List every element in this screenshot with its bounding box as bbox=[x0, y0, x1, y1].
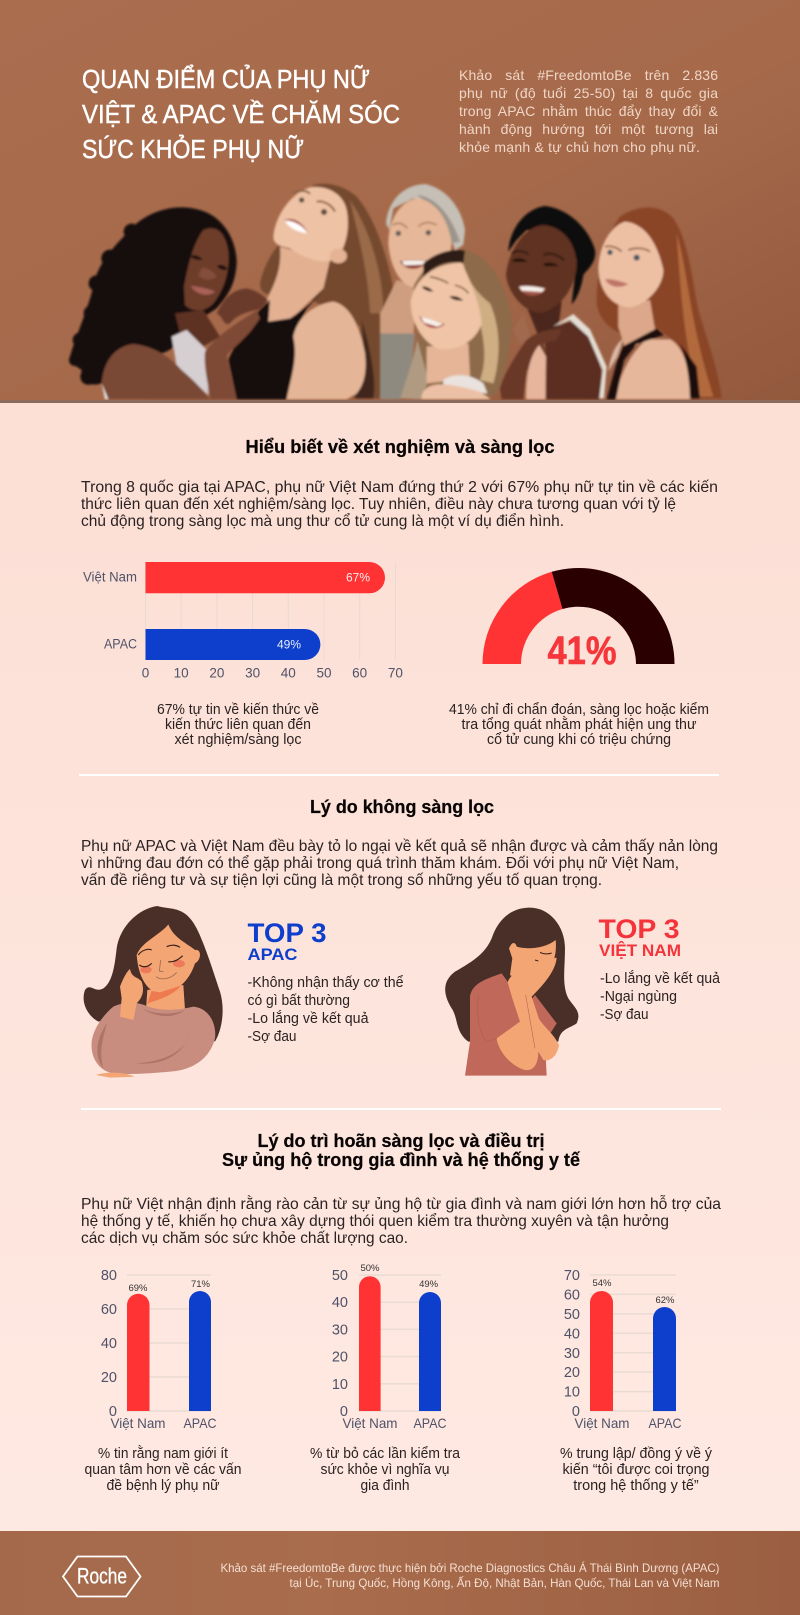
Roche logo: Roche bbox=[77, 1564, 127, 1588]
bar: Việt Nam 69% bbox=[127, 1294, 150, 1411]
horizontal bar chart: Việt Nam bbox=[83, 570, 137, 584]
bar: Việt Nam 67% bbox=[146, 562, 385, 593]
title: QUAN ĐIỂM CỦA PHỤ NỮ bbox=[82, 63, 370, 94]
column chart 1: 69% bbox=[128, 1283, 148, 1294]
survey description: trong APAC nhằm thúc đẩy thay đổi & bbox=[459, 103, 719, 119]
chart 3 caption: % trung lập/ đồng ý về ý bbox=[560, 1446, 713, 1462]
woman C hair bbox=[386, 184, 465, 250]
label: top 3 Việt Nam bbox=[598, 914, 681, 960]
horizontal bar chart: 49% bbox=[277, 638, 301, 652]
horizontal bar chart: 50 bbox=[316, 666, 332, 680]
woman A neck bbox=[175, 310, 220, 347]
heading: Lý do trì hoãn sàng lọc và điều trị bbox=[258, 1130, 544, 1151]
intro text: các dịch vụ chăm sóc sức khỏe chất lượng cao. bbox=[81, 1230, 408, 1247]
column chart 3: 40 bbox=[564, 1326, 580, 1342]
bar: APAC 71% bbox=[189, 1291, 211, 1411]
horizontal bar chart: 67% bbox=[346, 570, 370, 584]
woman B top bbox=[228, 288, 325, 399]
column chart 2: 50 bbox=[332, 1268, 348, 1284]
column chart 3: 62% bbox=[655, 1295, 675, 1306]
list: top 3 APAC reasons: -Lo lắng về kết quả bbox=[248, 1010, 369, 1027]
header bottom band bbox=[0, 400, 800, 403]
list: top 3 Việt Nam reasons bbox=[600, 970, 720, 1023]
Roche logo bbox=[63, 1556, 140, 1596]
chart 3 caption bbox=[560, 1446, 713, 1494]
column chart 1: Việt Nam bbox=[110, 1415, 166, 1431]
intro text bbox=[81, 479, 718, 530]
woman F neck bbox=[618, 300, 655, 353]
woman C neck and shirt bbox=[380, 280, 417, 337]
column chart 3: 30 bbox=[564, 1346, 580, 1362]
woman A face bbox=[184, 228, 229, 310]
survey description: khỏe mạnh & tự chủ hơn cho phụ nữ. bbox=[459, 139, 700, 155]
column chart 2: 10 bbox=[332, 1377, 348, 1393]
horizontal bar chart: 70 bbox=[388, 666, 403, 680]
intro text bbox=[81, 838, 718, 889]
woman E white strap bbox=[553, 314, 607, 398]
list: top 3 Việt Nam reasons: -Lo lắng về kết quả bbox=[600, 970, 720, 987]
panel: reasons for not screening bbox=[81, 796, 720, 1078]
illustration: woman covering her face bbox=[445, 908, 578, 1076]
column chart 1: 71% bbox=[191, 1279, 211, 1290]
horizontal bar chart: 0 bbox=[142, 666, 149, 680]
list: top 3 APAC reasons: -Không nhận thấy cơ thể bbox=[248, 975, 404, 991]
survey source note: tại Úc, Trung Quốc, Hồng Kông, Ấn Độ, Nhật Bản, Hàn Quốc, Thái Lan và Việt Nam bbox=[290, 1575, 720, 1590]
intro text bbox=[81, 1194, 721, 1247]
gauge caption: tra tổng quát nhằm phát hiện ung thư bbox=[462, 716, 697, 733]
column chart 3: 60 bbox=[564, 1288, 580, 1304]
label: top 3 Việt Nam: TOP 3 bbox=[598, 914, 680, 944]
panel: header bbox=[0, 0, 800, 400]
heading bbox=[222, 1130, 581, 1170]
page background bbox=[0, 400, 800, 1531]
horizontal bar chart: 30 bbox=[245, 666, 260, 680]
chart 1 caption bbox=[84, 1445, 242, 1494]
column chart 2: Việt Nam bbox=[342, 1415, 398, 1431]
woman C face bbox=[388, 198, 452, 287]
heading: Sự ủng hộ trong gia đình và hệ thống y tế bbox=[222, 1149, 581, 1170]
column chart 2: 0 bbox=[340, 1404, 348, 1420]
chart 2 caption: gia đình bbox=[360, 1478, 410, 1494]
intro text: Trong 8 quốc gia tại APAC, phụ nữ Việt Nam đứng thứ 2 với 67% phụ nữ tự tin về các kiến bbox=[81, 479, 718, 496]
woman A upper hand bbox=[217, 288, 268, 324]
woman A white top bbox=[172, 330, 208, 395]
list: top 3 Việt Nam reasons: -Sợ đau bbox=[600, 1007, 648, 1023]
column chart 3: 10 bbox=[564, 1384, 580, 1400]
woman E hair bbox=[508, 206, 595, 304]
column chart 2: APAC bbox=[414, 1415, 446, 1431]
label: top 3 APAC bbox=[248, 918, 326, 964]
woman A shoulder bbox=[102, 344, 210, 399]
survey source note: Khảo sát #FreedomtoBe được thực hiện bởi Roche Diagnostics Châu Á Thái Bình Dương (APAC) bbox=[220, 1560, 720, 1575]
intro text: Phụ nữ Việt nhận định rằng rào cản từ sự ủng hộ từ gia đình và nam giới lớn hơn hỗ trợ của bbox=[81, 1194, 721, 1213]
column chart 3: 0 bbox=[572, 1404, 580, 1420]
column chart 1: APAC bbox=[184, 1415, 216, 1431]
column chart 3: 54% bbox=[592, 1278, 612, 1289]
survey description: hành động hướng tới một tương lai bbox=[459, 121, 718, 137]
woman F body bbox=[616, 339, 690, 399]
bar chart caption: xét nghiệm/sàng lọc bbox=[174, 732, 302, 748]
chart 2 caption bbox=[310, 1446, 460, 1494]
panel: knowledge of testing and screening bbox=[81, 436, 718, 748]
horizontal bar chart bbox=[83, 562, 403, 680]
survey description bbox=[459, 67, 719, 155]
woman D hair bbox=[400, 249, 512, 399]
bar: Việt Nam 54% bbox=[590, 1291, 613, 1411]
list: top 3 APAC reasons: -Sợ đau bbox=[248, 1029, 296, 1045]
woman E face bbox=[506, 225, 577, 313]
bar chart caption: kiến thức liên quan đến bbox=[165, 717, 311, 733]
column chart 3: 20 bbox=[564, 1365, 580, 1381]
chart 2 caption: % từ bỏ các lần kiểm tra bbox=[310, 1446, 460, 1462]
label: top 3 Việt Nam: VIỆT NAM bbox=[599, 941, 681, 960]
bar: APAC 49% bbox=[146, 629, 320, 660]
intro text: vì những đau đớn có thể gặp phải trong quá trình thăm khám. Đối với phụ nữ Việt Nam, bbox=[81, 854, 679, 872]
gauge chart 41%: 41% bbox=[548, 629, 616, 673]
title bbox=[82, 63, 400, 164]
column chart 3: 70 bbox=[564, 1268, 580, 1284]
woman D neck and top bbox=[427, 343, 470, 383]
column chart 1: 80 bbox=[101, 1268, 117, 1284]
woman B face bbox=[273, 187, 348, 261]
label: top 3 APAC: APAC bbox=[248, 945, 298, 964]
bar chart caption: 67% tự tin về kiến thức về bbox=[157, 702, 319, 718]
horizontal bar chart: 10 bbox=[174, 666, 189, 680]
column chart 2: 40 bbox=[332, 1295, 348, 1311]
column chart 1 bbox=[101, 1268, 216, 1431]
horizontal bar chart: APAC bbox=[104, 636, 137, 652]
horizontal bar chart: 40 bbox=[281, 666, 296, 680]
column chart 3: APAC bbox=[648, 1415, 682, 1431]
column chart 1: 60 bbox=[101, 1302, 117, 1318]
survey description: Khảo sát #FreedomtoBe trên 2.836 bbox=[459, 67, 718, 83]
illustration: thoughtful woman bbox=[84, 906, 223, 1078]
woman B hair bbox=[260, 184, 395, 398]
column chart 1: 20 bbox=[101, 1370, 117, 1386]
column chart 3: Việt Nam bbox=[574, 1415, 630, 1431]
column chart 1: 0 bbox=[109, 1404, 117, 1420]
gauge caption: 41% chỉ đi chẩn đoán, sàng lọc hoặc kiểm bbox=[449, 702, 709, 718]
bar: APAC 49% bbox=[419, 1292, 441, 1411]
column chart 2: 49% bbox=[419, 1279, 439, 1290]
list: top 3 Việt Nam reasons: -Ngại ngùng bbox=[600, 989, 677, 1005]
column chart 2: 30 bbox=[332, 1322, 348, 1338]
list: top 3 APAC reasons: có gì bất thường bbox=[248, 993, 350, 1009]
panel: reasons for delaying screening and treatment bbox=[81, 1130, 721, 1494]
bar chart caption bbox=[157, 702, 319, 748]
chart 1 caption: quan tâm hơn về các vấn bbox=[84, 1462, 242, 1478]
column chart 2: 20 bbox=[332, 1350, 348, 1366]
panel: footer bbox=[0, 1531, 800, 1615]
list: top 3 APAC reasons bbox=[248, 975, 404, 1045]
label: top 3 APAC: TOP 3 bbox=[248, 918, 326, 948]
photo: six women bbox=[69, 184, 722, 399]
title: SỨC KHỎE PHỤ NỮ bbox=[82, 133, 304, 164]
intro text: hệ thống y tế, khiến họ chưa xây dựng thói quen kiểm tra thường xuyên và tận hưởng bbox=[81, 1212, 669, 1230]
woman A arm and hand bbox=[205, 311, 260, 399]
column chart 3 bbox=[564, 1268, 682, 1431]
survey description: phụ nữ (độ tuổi 25-50) tại 8 quốc gia bbox=[459, 85, 718, 101]
bar: APAC 62% bbox=[653, 1307, 676, 1411]
column chart 3: 50 bbox=[564, 1307, 580, 1323]
column chart 2: 50% bbox=[360, 1263, 380, 1274]
woman D face bbox=[411, 263, 482, 349]
gauge caption bbox=[449, 702, 709, 748]
woman A hair bbox=[70, 207, 237, 385]
title: VIỆT & APAC VỀ CHĂM SÓC bbox=[82, 99, 400, 129]
gauge caption: cổ tử cung khi có triệu chứng bbox=[487, 732, 671, 748]
intro text: vấn đề riêng tư và sự tiện lợi cũng là một trong số những yếu tố quan trọng. bbox=[81, 872, 602, 889]
woman B neck bbox=[267, 247, 330, 323]
heading: Lý do không sàng lọc bbox=[310, 796, 494, 817]
chart 2 caption: sức khỏe vì nghĩa vụ bbox=[320, 1462, 450, 1478]
heading: Hiểu biết về xét nghiệm và sàng lọc bbox=[246, 436, 554, 457]
bar: Việt Nam 50% bbox=[359, 1276, 381, 1411]
intro text: chủ động trong sàng lọc mà ung thư cổ tử cung là một ví dụ điển hình. bbox=[81, 512, 564, 530]
chart 3 caption: trong hệ thống y tế” bbox=[573, 1478, 699, 1494]
woman F face bbox=[598, 222, 663, 307]
woman E body bbox=[527, 302, 562, 340]
intro text: Phụ nữ APAC và Việt Nam đều bày tỏ lo ngại về kết quả sẽ nhận được và cảm thấy nản lòng bbox=[81, 838, 718, 855]
chart 1 caption: % tin rằng nam giới ít bbox=[98, 1445, 228, 1462]
woman B arm bbox=[287, 302, 366, 399]
woman E hands bbox=[513, 313, 530, 344]
chart 1 caption: đề bệnh lý phụ nữ bbox=[106, 1478, 220, 1494]
horizontal bar chart: 20 bbox=[209, 666, 224, 680]
woman F hair bbox=[597, 207, 722, 398]
intro text: thức liên quan đến xét nghiệm/sàng lọc. Tuy nhiên, điều này chưa tương quan với tỷ lệ bbox=[81, 496, 676, 513]
gauge chart 41% bbox=[482, 568, 675, 673]
horizontal bar chart: 60 bbox=[352, 666, 367, 680]
column chart 2 bbox=[332, 1263, 446, 1431]
survey source note bbox=[220, 1560, 720, 1590]
chart 3 caption: kiến “tôi được coi trọng bbox=[562, 1462, 710, 1478]
column chart 1: 40 bbox=[101, 1336, 117, 1352]
